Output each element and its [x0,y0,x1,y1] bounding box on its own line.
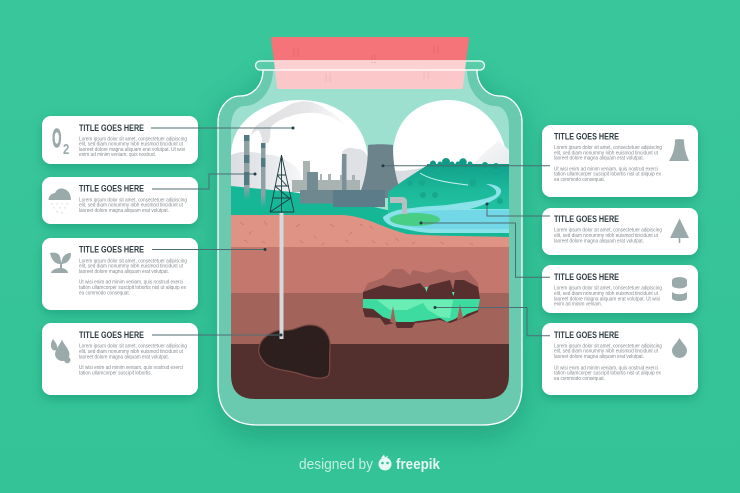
text block: elit, sed diam nonummy nibh euismod tincidunt ut [79,142,184,148]
text block [79,197,187,214]
text block: elit, sed diam nonummy nibh euismod tincidunt ut [554,150,659,156]
text block: laoreet dolore magna aliquam erat volutpat. [554,354,644,360]
text block [554,286,662,308]
lid red part [271,37,469,62]
heading: TITLE GOES HERE [79,245,144,255]
leader: pond [420,222,550,277]
text block: Lorem ipsum dolor sit amet, consectetuer adipiscing [79,197,187,203]
text block: Ut wisi enim ad minim veniam, quis nostrud exerci [79,280,183,286]
text block [79,344,187,376]
text block [79,258,187,296]
hill body [388,166,509,215]
pond [390,213,440,226]
left ground [231,186,388,225]
leader lines [151,126,550,336]
leader: chimney [152,172,256,189]
text block: Ut wisi enim ad minim veniam, quis nostrud exerci [79,365,183,371]
lid marks [294,45,438,82]
chimney two [261,143,266,208]
icon: freepik logo [378,454,392,470]
text block: tation ullamcorper suscipit lobortis nisl ut aliquip ex [554,371,661,377]
leader: cooling tower [382,164,550,167]
text block: laoreet dolore magna aliquam erat volutpat. Ut wisi [79,147,185,153]
text block: Ut wisi enim ad minim veniam, quis nostrud exerci [554,365,658,371]
drill pipe [280,213,284,339]
right card 3 [542,265,698,313]
text block [554,343,662,382]
factory base block [333,190,385,207]
text block: ea commodo consequat. [554,376,605,382]
underground cave [363,269,480,328]
text block: laoreet dolore magna aliquam erat volutpat. [79,269,169,275]
heading: TITLE GOES HERE [554,272,619,282]
right card 2 [542,208,698,255]
left card 2 [42,177,198,224]
smoke: left plume [251,101,346,143]
leader: forest [486,202,550,216]
text block: tation ullamcorper suscipit lobortis. [79,370,152,376]
icon: seedling [50,253,71,273]
jar shadow [218,76,522,435]
text block: Lorem ipsum dolor sit amet, consectetuer adipiscing [554,145,662,151]
icon: O2 [52,125,69,157]
heading: TITLE GOES HERE [79,184,144,194]
cave floor dark [363,306,479,328]
heading: TITLE GOES HERE [79,330,144,340]
water green [363,299,480,322]
soil texture [240,221,473,245]
text block: laoreet dolore magna aliquam erat volutpat. [79,354,169,360]
lid inside glass [274,62,466,89]
ground under river [395,227,509,237]
left sky dome [231,100,368,180]
leader: smoke [151,126,294,130]
text block: Lorem ipsum dolor sit amet, consectetuer adipiscing [79,344,187,350]
transmission tower [270,155,294,212]
footer credit [299,454,441,473]
jar lid [271,37,469,89]
text block: tation ullamcorper suscipit lobortis nisl ut aliquip ex [554,172,661,178]
text block: Lorem ipsum dolor sit amet, consectetuer adipiscing [79,258,187,264]
text block: enim ad minim veniam, quis nostrud. [79,152,156,158]
heading: TITLE GOES HERE [79,123,144,133]
icon: O2: 2 [63,140,69,157]
text block: laoreet dolore magna aliquam erat volutpat. Ut wisi [554,296,660,302]
text block: laoreet dolore magna aliquam erat volutpat. [554,238,644,244]
icon: barrels [672,277,687,301]
chimney one [244,135,250,200]
jar rim [256,61,484,70]
text block: laoreet dolore magna aliquam erat volutpat. [554,156,644,162]
text block [554,228,662,244]
left card 1 [42,116,198,164]
cooling tower [361,144,398,198]
cave ceiling light [363,269,480,293]
text block: elit, sed diam nonummy nibh euismod tincidunt ut [79,203,184,209]
text block: Lorem ipsum dolor sit amet, consectetuer adipiscing [554,343,662,349]
text block: ea commodo consequat. [79,290,130,296]
icon: cooling tower [669,139,689,161]
icon: rain cloud [48,188,71,214]
jar glass wall [218,70,522,425]
text block: elit, sed diam nonummy nibh euismod tincidunt ut [554,349,659,355]
right card 1 [542,125,698,197]
left card 3 [42,238,198,310]
jar inner glass [231,70,509,399]
smoke: haze behind factory [231,152,301,192]
text block: Ut wisi enim ad minim veniam, quis nostrud exerci [554,166,658,172]
scene clipped to jar interior [231,100,509,400]
right hills [388,158,509,215]
treeline [427,158,509,169]
heading: TITLE GOES HERE [554,330,619,340]
leader: cave water [434,306,550,336]
text block: elit, sed diam nonummy nibh euismod tincidunt ut [554,233,659,239]
text block: elit, sed diam nonummy nibh euismod tincidunt ut [79,349,184,355]
water highlight [377,300,453,318]
text block: elit, sed diam nonummy nibh euismod tincidunt ut [554,291,659,297]
text block: enim ad minim veniam. [554,302,602,308]
leader: oil pocket [152,334,282,336]
rock spikes [390,304,463,324]
left card 4 [42,323,198,395]
jar with landscape [218,70,522,425]
heading: TITLE GOES HERE [554,214,619,224]
text block: elit, sed diam nonummy nibh euismod tincidunt ut [79,264,184,270]
cave ceiling dark [363,280,480,299]
soil layers [231,215,509,400]
text block: Lorem ipsum dolor sit amet, consectetuer adipiscing [79,136,187,142]
icon: oil drops [51,339,71,363]
icon: tree [670,218,689,243]
text block: laoreet dolore magna aliquam erat volutpat. [79,208,169,214]
heading: TITLE GOES HERE [554,131,619,141]
text block [554,145,662,183]
credit text: designed by [299,457,374,473]
right sky dome [393,100,505,171]
icon: water drop [672,338,687,358]
text block [79,136,187,158]
stream line [420,173,468,185]
drips [425,287,454,296]
right card 4 [542,323,698,395]
smoke: right haze [395,167,424,184]
brand name: freepik [396,456,441,473]
text block: Lorem ipsum dolor sit amet, consectetuer adipiscing [554,286,662,292]
factory skyline [292,154,360,204]
smoke: haze around small chimney [340,148,368,190]
text block: ea commodo consequat. [554,177,605,183]
leader: soil [152,248,266,251]
text block: Lorem ipsum dolor sit amet, consectetuer adipiscing [554,228,662,234]
text block: tation ullamcorper suscipit lobortis nisl ut aliquip ex [79,285,186,291]
icon: O2: O [52,125,61,153]
pipe to pond [390,197,407,214]
river [383,184,509,233]
oil pocket [259,325,330,378]
small trees [408,180,503,204]
